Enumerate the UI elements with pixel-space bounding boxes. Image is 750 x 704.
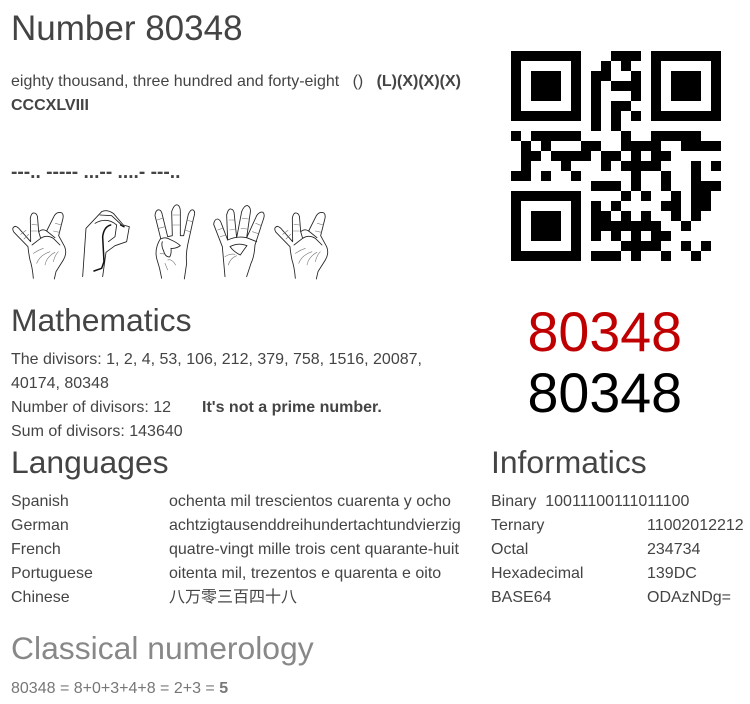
red number: 80348 <box>528 301 682 363</box>
language names: Spanish <box>11 493 69 510</box>
language names: French <box>11 541 61 558</box>
title: Number 80348 <box>11 9 243 48</box>
hand: sign 3 <box>155 205 195 279</box>
heading: Informatics: Informatics <box>491 444 647 480</box>
number in other languages: 八万零三百四十八 <box>169 589 297 606</box>
black number: 80348 <box>528 362 682 424</box>
heading: Classical numerology: Classical numerology <box>11 630 314 666</box>
hand: sign 8 repeated <box>275 212 328 279</box>
sign language hands <box>12 204 328 280</box>
number in other languages: oitenta mil, trezentos e quarenta e oito <box>169 565 441 582</box>
hand: sign 0 <box>83 211 129 277</box>
heading: Languages: Languages <box>11 444 169 480</box>
hand: sign 4 <box>214 206 264 277</box>
morse code: ---.. ----- ...-- ....- ---.. <box>11 162 180 183</box>
mathematics facts: The divisors: 1, 2, 4, 53, 106, 212, 379, 758, 1516, 20087, <box>11 351 422 368</box>
mathematics facts <box>11 351 422 440</box>
heading: Mathematics: Mathematics <box>11 302 192 338</box>
language names: German <box>11 517 69 534</box>
number in other languages: achtzigtausenddreihundertachtundvierzig <box>169 517 461 534</box>
base names: BASE64 <box>491 589 551 606</box>
number in other languages: ochenta mil trescientos cuarenta y ocho <box>169 493 451 510</box>
number in other languages <box>169 493 461 606</box>
mathematics facts: Sum of divisors: 143640 <box>11 423 183 440</box>
number in words and Roman numerals <box>11 73 461 114</box>
language names: Portuguese <box>11 565 93 582</box>
number in other languages: quatre-vingt mille trois cent quarante-huit <box>169 541 459 558</box>
base names: Binary 10011100111011100 <box>491 493 689 510</box>
language names <box>11 493 93 606</box>
number in words and Roman numerals: eighty thousand, three hundred and forty-eight () (L)(X)(X)(X) <box>11 73 461 90</box>
base names <box>491 493 689 606</box>
base values: 11002012212 <box>647 517 744 534</box>
mathematics facts: Number of divisors: 12 <box>11 399 171 416</box>
mathematics facts: It's not a prime number. <box>202 399 382 416</box>
base names: Octal <box>491 541 528 558</box>
base values: 234734 <box>647 541 700 558</box>
base values: 139DC <box>647 565 697 582</box>
hand: sign 8 <box>13 212 66 279</box>
base values <box>647 517 744 606</box>
QR code <box>511 51 721 261</box>
numerology calculation: 80348 = 8+0+3+4+8 = 2+3 = 5 <box>11 680 228 697</box>
number in words and Roman numerals: CCCXLVIII <box>11 97 89 114</box>
base names: Hexadecimal <box>491 565 583 582</box>
mathematics facts: 40174, 80348 <box>11 375 109 392</box>
language names: Chinese <box>11 589 70 606</box>
base names: Ternary <box>491 517 544 534</box>
base values: ODAzNDg= <box>647 589 731 606</box>
